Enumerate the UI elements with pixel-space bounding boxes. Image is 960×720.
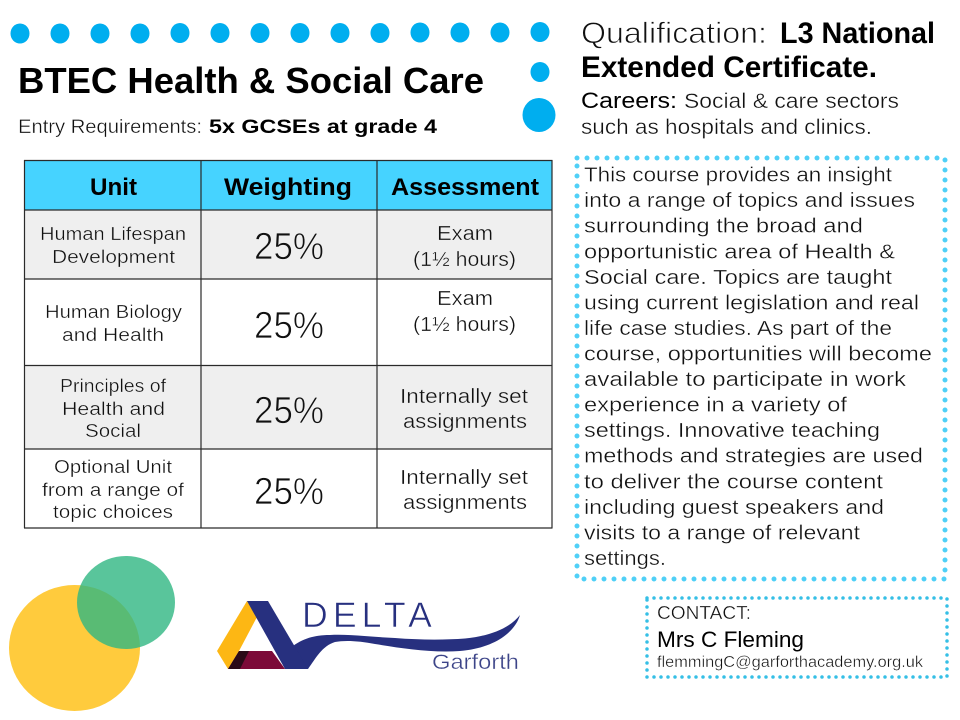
description text: using current legislation and real [584,291,919,314]
row: Human Lifespan Development: Development [52,247,175,267]
description text: including guest speakers and [584,496,884,519]
description text: life case studies. As part of the [584,317,892,340]
Delta Garforth logo [217,596,520,674]
qualification heading [581,17,935,84]
entry requirements: Entry Requirements: [18,117,202,138]
description text: Social care. Topics are taught [584,266,892,289]
table header row [24,160,552,210]
contact panel [647,598,947,677]
description text: methods and strategies are used [584,445,923,468]
row: Human Biology and Health: Human Biology [45,302,182,322]
entry requirements [18,117,438,138]
logo wordmark [302,596,519,674]
row: Optional Unit [24,449,552,528]
contact panel: CONTACT: [657,603,751,623]
careers text: Social & care sectors [684,90,899,113]
row: Principles of Health and Social: Principles of [60,376,167,396]
row: Human Lifespan Development [24,210,552,279]
row: Human Biology and Health: Exam [437,288,493,310]
logo wordmark: DELTA [302,596,437,635]
row: Principles of Health and Social: Social [85,421,141,441]
contact panel: Mrs C Fleming [657,627,804,652]
description text: into a range of topics and issues [584,189,915,212]
table header row: Unit [90,174,137,201]
row: Principles of Health and Social: 25% [254,390,324,432]
row: Human Biology and Health [24,279,552,366]
row: Optional Unit: Internally set [400,467,528,489]
row: Principles of Health and Social [24,366,552,449]
description text: settings. Innovative teaching [584,419,880,442]
description text [584,164,932,570]
table: units, weighting, assessment [24,160,552,528]
row: Optional Unit: Optional Unit [54,457,172,477]
row: Principles of Health and Social: Internally set [400,386,528,408]
row: Human Lifespan Development: Human Lifespan [40,224,186,244]
title: BTEC Health & Social Care [18,60,484,101]
contact panel: flemmingC@garforthacademy.org.uk [657,654,923,671]
careers text: such as hospitals and clinics. [581,116,872,139]
description text: experience in a variety of [584,394,847,417]
overlapping circles [9,556,175,711]
description text: opportunistic area of Health & [584,240,895,263]
description text: to deliver the course content [584,470,883,493]
decorative dots: top row and right column [10,22,556,132]
description text: available to participate in work [584,368,907,391]
logo wordmark: Garforth [432,651,519,674]
careers text: Careers: [581,88,677,113]
table header row: Assessment [391,174,539,201]
row: Human Lifespan Development: Exam [437,223,493,245]
row: Human Biology and Health: (1½ hours) [413,314,516,336]
row: Human Lifespan Development: 25% [254,226,324,268]
logo swoosh [293,615,520,669]
row: Human Biology and Health: 25% [254,305,324,347]
row: Human Lifespan Development: (1½ hours) [413,249,516,271]
careers text [581,88,899,139]
description text: This course provides an insight [584,164,892,187]
row: Principles of Health and Social: Health and [62,399,165,419]
row: Principles of Health and Social: assignments [403,411,527,433]
description panel [577,158,945,579]
qualification heading: L3 National [780,17,935,50]
row: Optional Unit: assignments [403,492,527,514]
row: Optional Unit: from a range of [42,480,185,500]
row: Human Biology and Health: and Health [62,325,164,345]
entry requirements: 5x GCSEs at grade 4 [209,117,438,138]
description text: visits to a range of relevant [584,521,860,544]
description text: settings. [584,547,666,570]
description text: surrounding the broad and [584,215,863,238]
logo triangle [217,601,308,669]
qualification heading: Qualification: [581,17,767,50]
table header row: Weighting [224,174,352,201]
qualification heading: Extended Certificate. [581,51,877,84]
row: Optional Unit: topic choices [53,502,173,522]
row: Optional Unit: 25% [254,471,324,513]
description text: course, opportunities will become [584,342,932,366]
